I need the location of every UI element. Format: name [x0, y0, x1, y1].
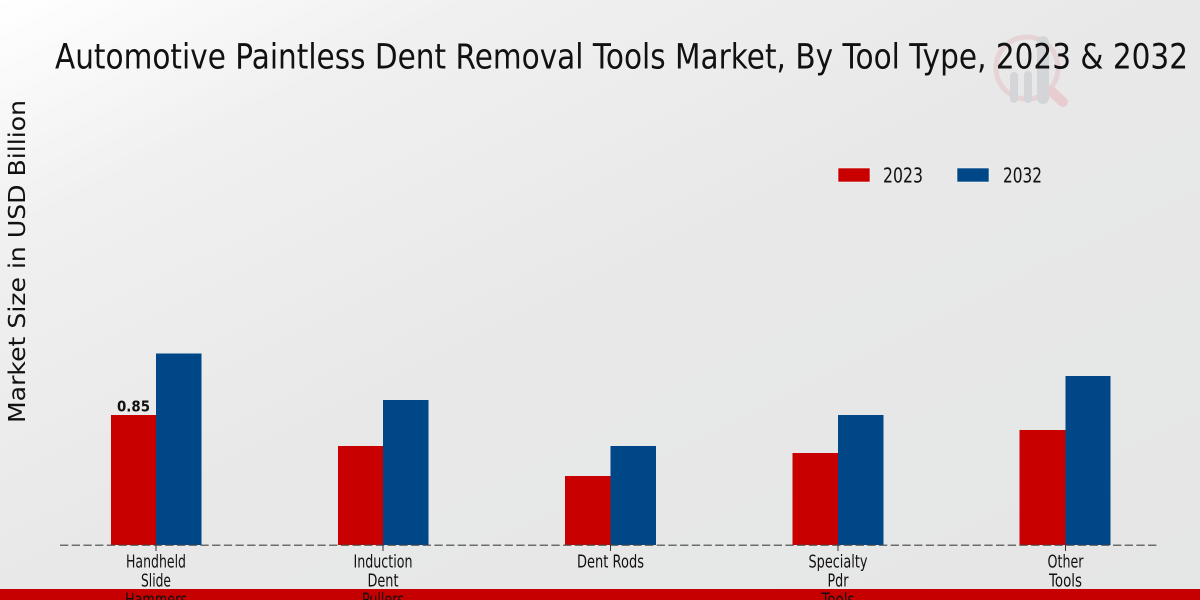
category label: Dent Rods: Dent Rods: [577, 552, 644, 572]
category label: Specialty Pdr Tools: Pdr: [828, 572, 849, 592]
bar chart: [60, 354, 1159, 551]
category label: Handheld Slide Hammers: Slide: [141, 572, 171, 592]
legend: 2023: [883, 164, 923, 188]
category label: Specialty Pdr Tools: Specialty: [808, 552, 868, 572]
bars: Dent Rods: [565, 446, 656, 545]
category label: Handheld Slide Hammers: [125, 552, 187, 600]
legend: [838, 164, 1042, 188]
category label: Other Tools: Tools: [1048, 572, 1082, 592]
bars: Handheld Slide Hammers: [111, 354, 202, 545]
footer bar: [0, 589, 1200, 600]
legend: 2032: [1003, 164, 1042, 188]
category label: Other Tools: Other: [1048, 552, 1084, 572]
bars: Induction Dent Pullers: [338, 400, 428, 545]
category label: Handheld Slide Hammers: Handheld: [126, 552, 186, 572]
data label: 0.85: [117, 398, 150, 416]
bars: Other Tools: [1020, 376, 1110, 545]
category label: Induction Dent Pullers: [354, 552, 412, 600]
bars: Specialty Pdr Tools: [792, 415, 884, 545]
y axis label: Market Size in USD Billion: [5, 100, 31, 423]
x axis baseline: [60, 544, 1159, 546]
category label: Induction Dent Pullers: Dent: [368, 572, 399, 592]
category label: Specialty Pdr Tools: [808, 552, 868, 600]
category label: Other Tools: [1048, 552, 1084, 592]
icon: watermark magnifier logo: [996, 37, 1063, 102]
category label: Induction Dent Pullers: Induction: [354, 552, 412, 572]
